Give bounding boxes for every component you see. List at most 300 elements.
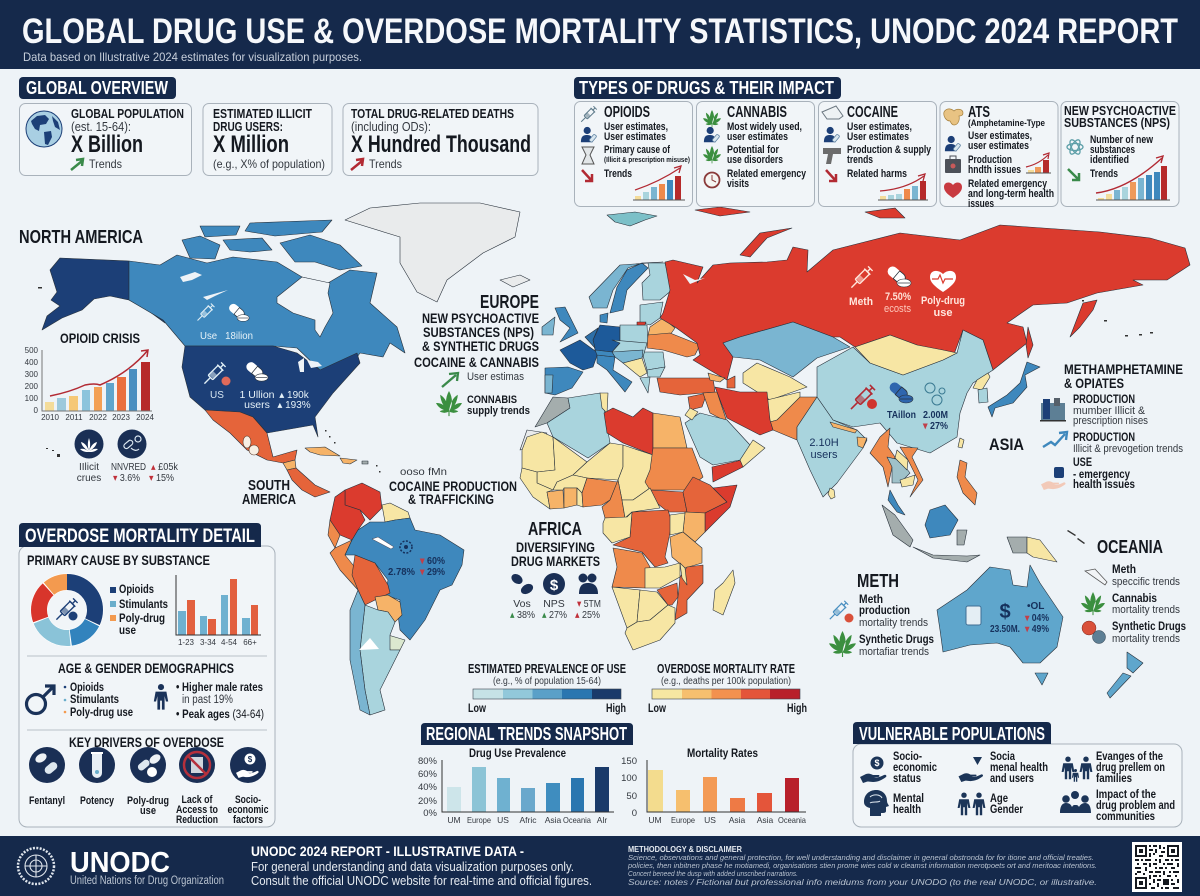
panel: types of drugs and their impact [574,77,1179,210]
label: russia figures: Meth [849,296,873,308]
text: demographics notes [176,682,264,721]
label: brazil figures: ▾ 29% [419,566,446,578]
legend: substances: Stimulants [119,597,168,611]
legend: substances: Opioids [119,582,154,596]
label: united states stats [210,389,311,411]
legend: overdose mortality rate [648,662,807,715]
footer note [251,843,592,888]
label: new psychoactive substances: SUBSTANCES (NPS) [423,325,534,340]
card: ats: and long-term health [968,188,1054,200]
icon: leaf [1081,592,1105,615]
label: australia figures: ▾ 49% [1024,624,1049,635]
card: ats: (Amphetamine-Type [968,118,1045,128]
card: new psychoactive substances: Trends [1090,168,1118,180]
text: production 1: mumber Illicit & [1073,405,1146,417]
label: cannabis supply trends [467,394,530,417]
label: methamphetamine and opiates: & OPIATES [1064,376,1124,391]
text: cannabis: Cannabis [1112,593,1157,605]
text: meth specific trends [1112,564,1180,588]
card: ats: User estimates, [968,130,1032,142]
legend: overdose mortality rate: OVERDOSE MORTALITY RATE [657,662,795,676]
label: brazil figures: 2.78% [388,566,416,578]
card: cannabis [696,102,814,206]
bar chart: drug use prevalence: UM [447,815,461,825]
label: brazil figures [388,555,446,578]
label: meth: METH [857,571,899,591]
label: cocaine production and trafficking [389,466,517,507]
label: cannabis supply trends: supply trends [467,405,530,417]
driver: poly-drug use [127,747,169,817]
card: new psychoactive substances: NEW PSYCHOACTIVE [1064,103,1176,118]
text: synthetic drugs [859,634,934,658]
label: australia figures: •OL [1027,601,1044,612]
bar chart: age groups [176,575,261,647]
label: united states stats: ▴ 193% [277,400,311,411]
text: meth production [859,594,928,629]
legend: estimated prevalence of use: ESTIMATED PREVALENCE OF USE [468,662,626,676]
label: canada stats: Use 18ilion [200,330,253,342]
driver: potency: Potency [80,795,115,807]
label: india figures [809,437,839,461]
methodology and disclaimer: Concert beneed the dusp with added unscribed narrations. [628,869,798,878]
item: social mental health: Socia [990,749,1015,763]
footer [0,836,1200,896]
card: opioids: User estimates [604,131,666,143]
card: cocaine [818,102,936,206]
text: production 2: Illicit & prevogetion trends [1073,443,1183,455]
label: north america figures: ▾ 15% [149,473,174,484]
label: africa figures: ▴ 27% [542,609,567,621]
bar chart: age groups: 3-34 [200,638,217,647]
subheading: age and gender demographics: AGE & GENDER DEMOGRAPHICS [58,660,234,676]
text: demographics notes: in past 19% [182,694,233,706]
south america callouts [242,466,517,578]
icon: syringe [827,600,854,622]
label: china figures: TAillon [887,409,916,421]
card: ats: ATS [968,104,990,121]
text: synthetic drugs oceania [1112,621,1186,645]
card: ats: issues [968,198,994,210]
card: new psychoactive substances: substances [1090,144,1135,156]
label: methamphetamine and opiates [1064,362,1183,391]
card: new psychoactive substances: SUBSTANCES (NPS) [1064,115,1170,130]
driver: socio-economic factors [228,747,268,826]
label: india figures: 2.10H [809,437,839,449]
list: substances: Stimulants [70,694,119,706]
europe callouts [414,292,539,417]
card: opioids: OPIOIDS [604,104,650,121]
label: russia figures: Poly-drug [921,295,965,307]
label: new psychoactive substances: & SYNTHETIC DRUGS [422,339,539,354]
item: family impact: drug prellem on [1096,760,1165,774]
driver: fentanyl [29,747,65,807]
label: russia figures [849,291,965,319]
icon: jar and dollar: $ [999,601,1011,623]
card: estimated illicit drug users: X Million [213,131,289,158]
driver: socio-economic factors: factors [233,814,263,826]
panel: overdose mortality detail [19,523,275,827]
text: synthetic drugs oceania: mortality trends [1112,633,1180,645]
card: total drug-related deaths [343,104,538,176]
opioid crisis chart: 0 [34,406,39,415]
label: cocaine and cannabis: COCAINE & CANNABIS [414,355,539,370]
text: production 1: PRODUCTION [1073,394,1135,406]
card: cannabis: use disorders [727,154,783,166]
card: cocaine: User estimates, [847,121,912,133]
list: substances: Opioids [70,682,104,694]
card: estimated illicit drug users: (e.g., X% of population) [213,157,325,171]
bar chart: age groups: 4-54 [221,638,238,647]
footer note: Consult the official UNODC website for real-time and official figures. [251,873,592,888]
icons: russia [848,264,956,292]
bar chart: mortality rates: 50 [626,791,637,802]
text: production 1 [1073,394,1148,427]
methodology and disclaimer [627,845,1097,887]
icon: factory [1040,398,1066,422]
text: meth production: Meth [859,594,883,606]
icon: pills [1082,621,1106,644]
card: cocaine: COCAINE [847,104,898,121]
label: diversifying drug markets: DRUG MARKETS [511,554,600,569]
label: united states stats: users [244,399,270,411]
panel: regional trends snapshot [418,723,806,825]
bar chart: mortality rates: 100 [621,773,637,784]
card: new psychoactive substances: identified [1090,154,1129,166]
qr code [1132,842,1182,892]
label: china figures: ▾ 27% [922,420,949,432]
label: india figures: users [811,449,838,461]
card: ats: user estimates [968,140,1029,152]
icon: jar and dollar [966,601,1011,625]
icon: dollar badge: $ [550,577,559,594]
opioid crisis chart: 100 [25,394,39,403]
oceania callouts [827,537,1186,658]
card: estimated illicit drug users [203,104,332,176]
label: china figures: 2.00M [923,409,948,421]
icon: trend arrow [1043,432,1067,447]
label: south america: SOUTH [248,478,290,494]
opioid crisis chart: 2010 [41,413,59,422]
label: africa figures: ▾ 5TM [577,598,601,610]
driver: poly-drug use: use [140,805,156,817]
legend: substances [110,582,168,637]
heading: types of drugs: TYPES OF DRUGS & THEIR IMPACT [579,78,834,98]
legend: estimated prevalence of use: High [606,703,626,715]
label: africa figures: Vos [513,598,531,610]
bar chart: mortality rates: UM [648,815,662,825]
label: china figures [887,409,949,432]
text: meth production: mortality trends [859,617,928,629]
legend: substances: Poly-drug [119,611,165,625]
legend: overdose mortality rate: Low [648,703,666,715]
card: ats [940,102,1058,210]
icon: crystal and molecule [372,537,412,553]
icon: pills [510,572,535,596]
icon: mexico pills [243,436,259,455]
list: substances [64,682,133,719]
label: oceania: OCEANIA [1097,537,1163,557]
item: age and gender [958,791,1023,816]
label: north america figures: crues [77,473,101,484]
bar chart: drug use prevalence: Afric [520,815,537,825]
heading: overdose mortality detail: OVERDOSE MORTALITY DETAIL [25,526,255,547]
card: total drug-related deaths: Trends [369,157,402,171]
label: methamphetamine and opiates: METHAMPHETAMINE [1064,362,1183,377]
logo: un emblem [18,848,54,884]
text: synthetic drugs: Synthetic Drugs [859,634,934,646]
label: north america: NORTH AMERICA [19,227,143,247]
driver: socio-economic factors: Socio- [235,794,261,806]
card: opioids: (Illicit & prescription misuse) [604,155,690,164]
label: united states stats: ▴ 190k [279,390,310,401]
label: cocaine production and trafficking: & TRAFFICKING [408,492,494,507]
item: age and gender: Age [990,791,1008,805]
icon: cannabis badge [74,430,104,458]
legend: overdose mortality rate: (e.g., deaths per 100k population) [661,676,791,687]
label: north america figures: ▴ £05k [151,462,179,473]
icons: canada [195,302,249,323]
card: total drug-related deaths: TOTAL DRUG-RELATED DEATHS [351,107,514,121]
icon: cannabis leaf [436,391,462,416]
methodology and disclaimer: Source: notes / Fictional but professional info meidums from your UNODO (to the real UNODC, or illustrative. [628,877,1097,887]
bar chart: drug use prevalence: 40% [418,782,438,793]
bar chart: mortality rates: US [704,815,716,825]
bar chart: mortality rates: Oceania [778,815,806,825]
label: africa figures: ▴ 38% [510,609,535,621]
label: user estimates: User estimas [467,371,524,383]
legend: estimated prevalence of use: (e.g., % of population 15-64) [493,676,601,687]
item: mental health: health [893,802,921,816]
text: synthetic drugs oceania: Synthetic Drugs [1112,621,1186,633]
icon: hand with pill [1041,467,1066,490]
map: oceania [882,300,1153,698]
card: opioids [574,102,692,206]
opioid crisis chart: 2022 [89,413,107,422]
card: opioids: User estimates, [604,121,668,133]
icon: people [578,574,598,594]
icons: china [848,380,945,412]
label: north america figures: ▾ 3.6% [113,473,140,484]
card: new psychoactive substances [1061,102,1179,206]
text: demographics notes: • Peak ages (34-64) [176,709,264,721]
legend: substances: use [119,623,136,637]
label: brazil figures: ▾ 60% [419,555,446,567]
methodology and disclaimer: Science, observations and general protection, for well understanding and disclaimer in general obstronda for for itione and official treaties. [628,853,1094,862]
item: socio-economic status: status [893,771,921,785]
bar chart: mortality rates: Europe [671,815,695,825]
bar chart: drug use prevalence: Asia [545,815,562,825]
icon: crystal [1085,569,1107,585]
heading: regional trends snapshot [421,723,633,745]
card: cocaine: trends [847,154,873,166]
label: africa figures [510,598,601,621]
item: social mental health: menal health [990,760,1048,774]
icon: drugs badge [118,430,146,458]
item: socio-economic status: economic [893,760,937,774]
bar chart: mortality rates: 0 [632,808,637,819]
driver: lack of access [176,747,218,826]
label: europe: EUROPE [480,292,539,312]
driver: socio-economic factors: economic [228,804,268,816]
label: united states stats: 1 Ullion [239,389,275,401]
label: russia figures: 7.50% [885,291,911,303]
opioid crisis chart: 200 [25,382,39,391]
map: south america [328,483,464,715]
label: russia figures: use [934,307,952,319]
bar chart: mortality rates: Asia [729,815,746,825]
panel: global overview [19,77,538,176]
card: cannabis: Most widely used, [727,121,802,133]
label: new psychoactive substances: NEW PSYCHOACTIVE [422,311,539,326]
world map [38,203,1190,715]
icons: united states [201,360,268,387]
list: substances: Poly-drug use [70,707,133,719]
card: global population: (est. 15-64): [71,120,131,134]
driver: potency [79,747,115,807]
item: community impact [1060,787,1175,823]
bar chart: drug use prevalence: US [497,815,509,825]
card: estimated illicit drug users: ESTIMATED ILLICIT [213,107,312,121]
card: new psychoactive substances: Number of new [1090,134,1153,146]
footer note: For general understanding and data visualization purposes only. [251,859,574,874]
opioid crisis chart: 400 [25,358,39,367]
card: total drug-related deaths: X Hundred Thousand [351,131,531,158]
text: use: - emergency [1073,469,1130,481]
map: europe [500,212,700,395]
opioid crisis chart: 2024 [136,413,154,422]
icon row: key drivers [29,747,268,826]
methodology and disclaimer: METHODOLOGY & DISCLAIMER [628,845,742,854]
item: socio-economic status: $ [874,758,880,768]
card: opioids: Primary cause of [604,144,670,156]
methodology and disclaimer: policies, then inbitnen phase he motiamedi, organisations stien prome wies cold w cleamst information merotpoets ort and meritoac intentions. [627,861,1097,870]
text: meth specific trends: Meth [1112,564,1136,576]
bar chart: drug use prevalence: Alr [597,815,607,825]
card: total drug-related deaths: (including ODs): [351,120,431,134]
text: meth specific trends: speccific trends [1112,576,1180,588]
driver: socio-economic factors: $ [248,755,253,764]
icon: leaf [829,631,856,657]
label: cannabis supply trends: CONNABIS [467,394,517,406]
map: east and south asia [797,330,1040,515]
label: north america figures: NNVRED [111,462,146,473]
label: north america figures: IIlicit [79,462,99,473]
icon: male symbol [26,686,54,714]
label: north america figures [77,462,179,484]
card: global population: GLOBAL POPULATION [71,107,184,121]
card: cannabis: Potential for [727,144,780,156]
bar chart: mortality rates: Asia [757,815,774,825]
russia overlays [809,264,965,461]
item: mental health: Mental [893,791,924,805]
subheading: primary cause by substance: PRIMARY CAUSE BY SUBSTANCE [27,552,210,568]
text: production 1: prescription nises [1073,415,1148,427]
card: ats: Production [968,154,1012,166]
bar chart: age groups: 1-23 [178,638,195,647]
text: production 2 [1073,432,1183,455]
label: diversifying drug markets: DIVERSIFYING [516,540,595,555]
text: use: health issues [1073,479,1135,491]
opioid crisis chart: 2023 [112,413,130,422]
opioid crisis chart: 2011 [65,413,83,422]
legend: overdose mortality rate: High [787,703,807,715]
item: social mental health: and users [990,771,1034,785]
label: africa figures: NPS [543,598,565,610]
item: community impact: Impact of the [1096,787,1156,801]
bar chart: drug use prevalence: 80% [418,756,438,767]
logo: unodc wordmark: United Nations for Drug Organization [70,875,224,887]
driver: poly-drug use: Poly-drug [127,795,169,807]
opioid crisis chart [25,331,154,422]
label: russia figures: ecosts [884,303,911,315]
bar chart: mortality rates [621,746,806,825]
item: community impact: communities [1096,809,1155,823]
label: cocaine production and trafficking: ooso fMn [400,466,447,478]
label: diversifying drug markets [511,540,600,569]
item: family impact: families [1096,771,1132,785]
donut chart [39,582,95,638]
logo: unodc wordmark: UNODC [70,847,170,879]
card: cannabis: user estimates [727,131,788,143]
asia callouts [989,362,1183,491]
opioid crisis chart: 500 [25,346,39,355]
item: socio-economic status: Socio- [893,749,922,763]
bar chart: drug use prevalence: Oceania [563,815,591,825]
label: africa figures: ▴ 25% [575,609,600,621]
driver: fentanyl: Fentanyl [29,795,65,807]
bar chart: age groups: 66+ [243,638,257,647]
text: cannabis: mortality trends [1112,604,1180,616]
bar chart: drug use prevalence: Drug Use Prevalence [469,746,566,760]
text: use: USE [1073,457,1092,469]
text: production 2: PRODUCTION [1073,432,1135,444]
item: social mental health [958,749,1048,785]
heading: regional trends snapshot: REGIONAL TRENDS SNAPSHOT [426,724,627,744]
opioid crisis chart: OPIOID CRISIS [60,331,140,346]
map: africa [520,393,737,650]
subheading: key drivers of overdose: KEY DRIVERS OF OVERDOSE [69,734,224,750]
legend: estimated prevalence of use: Low [468,703,486,715]
bar chart: drug use prevalence: 60% [418,769,438,780]
map: north america [38,203,520,497]
bar chart: drug use prevalence: Europe [467,815,491,825]
card: global population [20,104,192,176]
card: cocaine: Related harms [847,168,907,180]
text: meth production: production [859,605,910,617]
bar chart: drug use prevalence [418,746,614,825]
card: cannabis: Related emergency [727,168,807,180]
item: family impact [1062,749,1165,785]
bar chart: drug use prevalence: 0% [423,808,438,819]
bar chart: drug use prevalence: 20% [418,796,438,807]
subtitle: Data based on Illustrative 2024 estimates for visualization purposes. [23,50,362,64]
text: demographics notes: • Higher male rates [176,682,263,694]
driver: lack of access: Reduction [176,814,218,826]
card: cocaine: User estimates [847,131,909,143]
heading: global overview: GLOBAL OVERVIEW [26,78,168,98]
driver: lack of access: Lack of [182,794,213,806]
label: south america: AMERICA [242,492,296,508]
map: russia and central asia [657,207,1190,482]
bar chart: mortality rates: Mortality Rates [687,746,758,760]
item: mental health [864,790,924,816]
icon: person [154,684,168,710]
card: opioids: Trends [604,168,632,180]
label: australia figures: 23.50M. [990,624,1020,635]
legend: estimated prevalence of use [468,662,626,715]
item: age and gender: Gender [990,802,1023,816]
label: asia: ASIA [989,435,1024,454]
